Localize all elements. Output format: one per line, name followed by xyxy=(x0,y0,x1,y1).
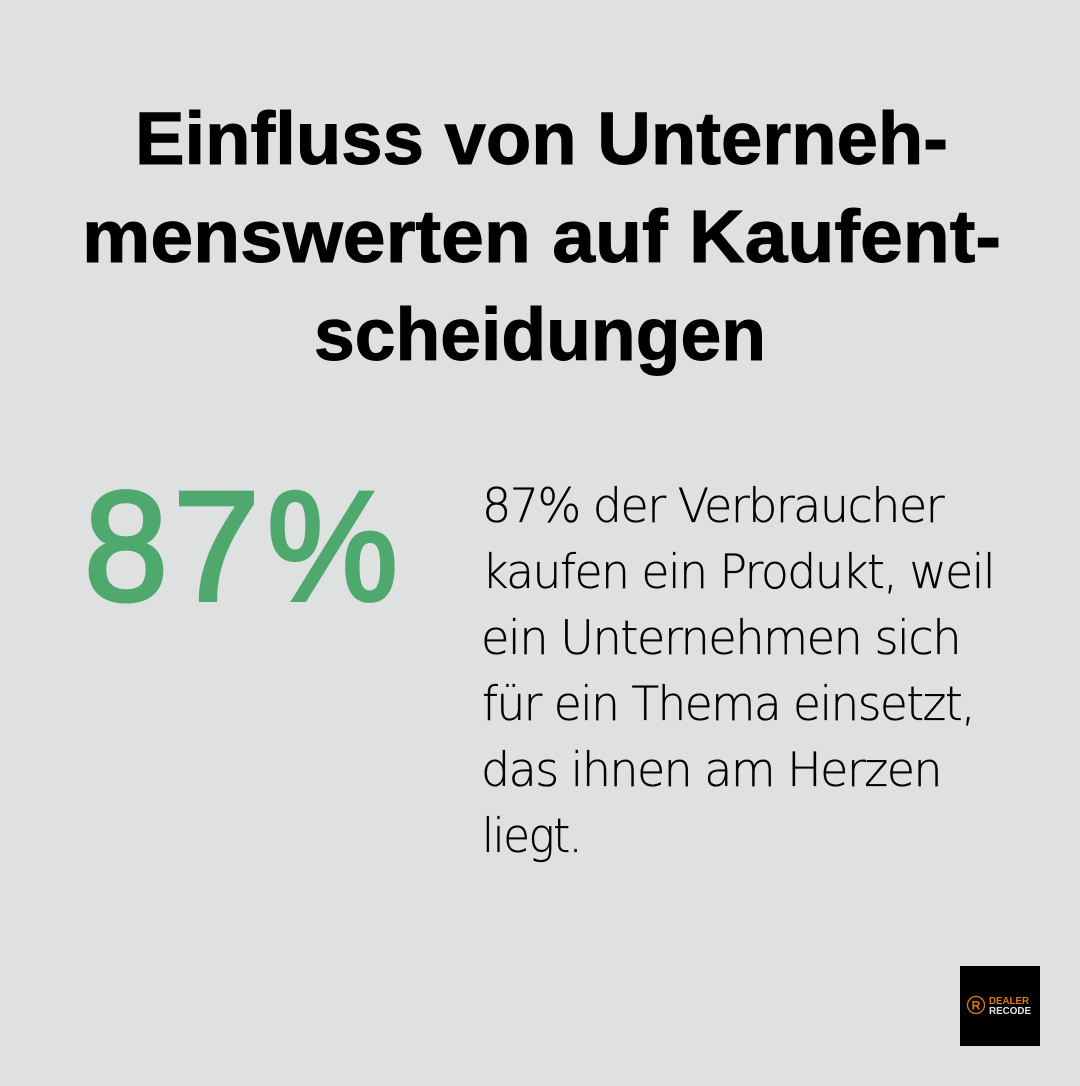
title: menswerten auf Kaufent- xyxy=(82,195,1001,278)
big statistic: 87%: 7 xyxy=(173,460,260,634)
big statistic: 87%: % xyxy=(267,460,398,634)
title: Einfluss von Unterneh- xyxy=(135,97,948,180)
logo: Dealer Recode xyxy=(960,966,1040,1046)
big statistic: 87% xyxy=(84,460,398,634)
logo wordmark xyxy=(989,996,1031,1017)
logo wordmark: RECODE xyxy=(989,1006,1031,1017)
icon: R in circle: R xyxy=(972,998,981,1012)
description text: ein Unternehmen sich xyxy=(481,611,960,666)
description text: liegt. xyxy=(482,809,581,864)
description text xyxy=(481,479,994,864)
title xyxy=(82,97,1001,376)
logo wordmark: DEALER xyxy=(989,996,1030,1007)
description text: das ihnen am Herzen xyxy=(481,743,941,798)
description text: 87% der Verbraucher xyxy=(482,479,945,534)
description text: für ein Thema einsetzt, xyxy=(482,677,974,732)
description text: kaufen ein Produkt, weil xyxy=(482,545,994,600)
big statistic: 87%: 8 xyxy=(84,460,168,634)
title: scheidungen xyxy=(314,293,766,376)
